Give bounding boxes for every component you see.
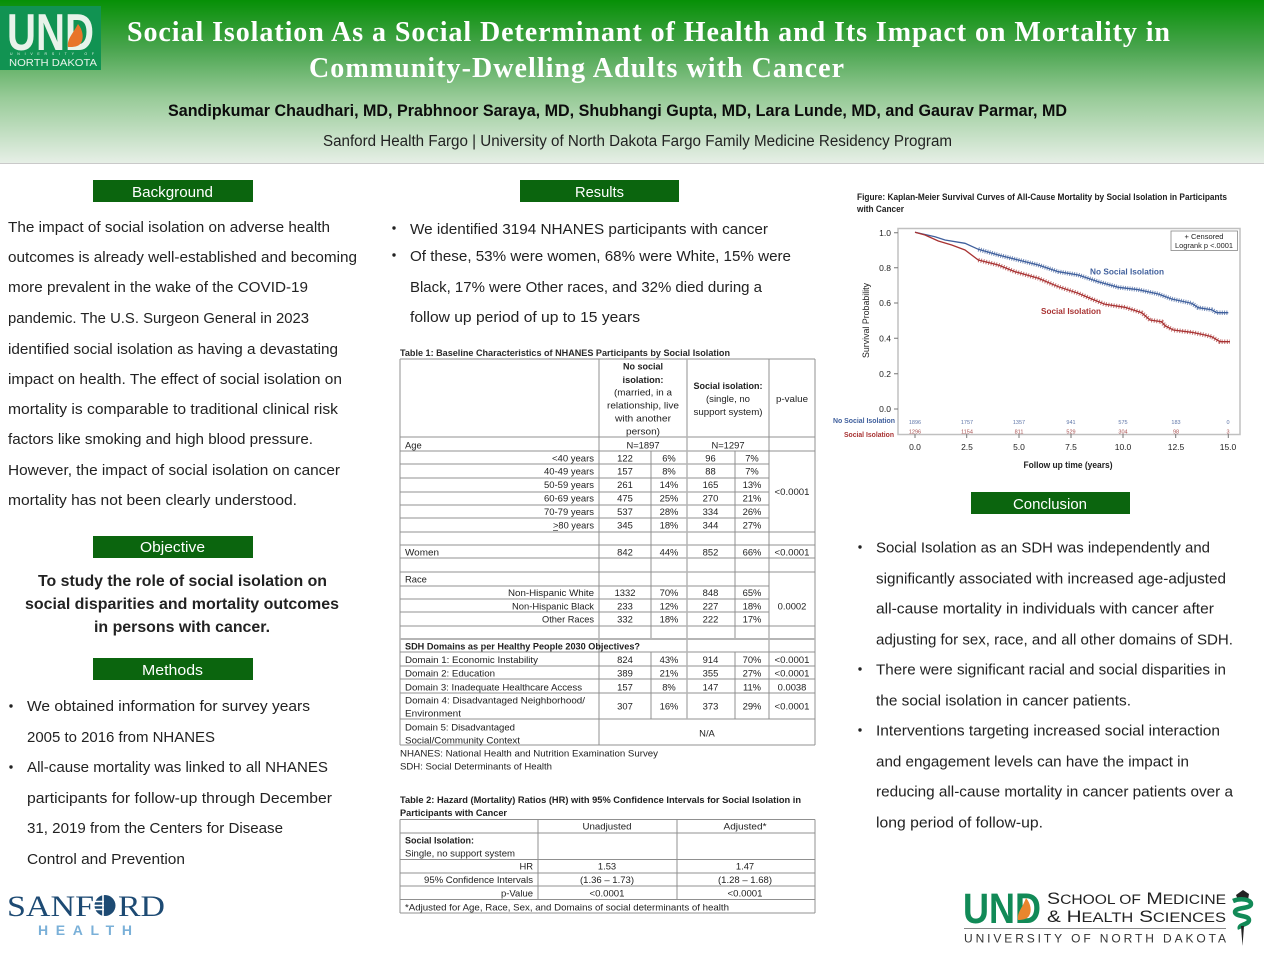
- table 1 SDH domain rows: 8%: [662, 682, 676, 692]
- logo: Sanford Health: RD: [118, 890, 165, 923]
- table 2 rows: 1.53: [598, 860, 616, 872]
- table 1 SDH domain rows: 157: [617, 682, 633, 692]
- table 1 header: relationship, live: [607, 400, 679, 410]
- at-risk table: 1296: [909, 430, 921, 436]
- table 1 race rows: Non-Hispanic Black: [512, 600, 594, 612]
- heading: conclusion: Conclusion: [1013, 497, 1087, 513]
- at-risk table: 941: [1066, 420, 1076, 426]
- table 1 women row: <0.0001: [774, 546, 810, 558]
- curve label: social isolation: Social Isolation: [1041, 306, 1101, 316]
- at-risk table: 304: [1118, 430, 1128, 436]
- y axis labels: 0.8: [879, 263, 891, 273]
- table 1 SDH domain rows: 11%: [743, 682, 761, 692]
- table 1 women row: 66%: [743, 546, 761, 558]
- text: conclusion bullets: Interventions targeting increased social interaction: [876, 722, 1220, 740]
- text: methods bullets: participants for follow-up through December: [27, 790, 332, 807]
- table 1 age rows: 70-79 years: [544, 506, 594, 517]
- legend box: + Censored: [1185, 232, 1223, 241]
- table 1 SDH domain rows: 27%: [743, 668, 761, 678]
- header banner: [0, 0, 1264, 164]
- authors: Sandipkumar Chaudhari, MD, Prabhnoor Saraya, MD, Shubhangi Gupta, MD, Lara Lunde, MD, and Gaurav Parmar, MD: [168, 102, 1067, 120]
- table 1 age rows: 344: [703, 520, 718, 530]
- table 1 age rows: <0.0001: [774, 486, 810, 497]
- table 1 age rows: 122: [617, 452, 633, 464]
- heading: results: [520, 180, 679, 202]
- title: Social Isolation As a Social Determinant of Health and Its Impact on Mortality in: [127, 17, 1170, 48]
- text: methods bullets: 2005 to 2016 from NHANES: [27, 729, 215, 746]
- table 1 header: Age: [405, 440, 422, 450]
- text: conclusion bullets: reducing all-cause mortality in cancer patients over a: [876, 784, 1234, 800]
- table 1 age rows: 345: [617, 520, 633, 530]
- panel: conclusion: [858, 492, 1234, 832]
- table 2 caption: Table 2: Hazard (Mortality) Ratios (HR) with 95% Confidence Intervals for Social Isolation in: [400, 794, 801, 805]
- table 1 SDH domain rows: <0.0001: [774, 654, 810, 665]
- curve: social isolation: [915, 232, 1230, 342]
- table 1 SDH domain rows: 70%: [743, 654, 761, 665]
- at-risk table: [833, 416, 1230, 439]
- text: background paragraph: factors like smoking and high blood pressure.: [8, 431, 313, 448]
- table 1 SDH domain rows: 389: [617, 668, 633, 678]
- text: background paragraph: more prevalent in the wake of the COVID-19: [8, 279, 308, 296]
- text: background paragraph: However, the impact of social isolation on cancer: [8, 462, 340, 479]
- table 1 race rows: [405, 574, 806, 624]
- table 1 header: [405, 360, 808, 450]
- y axis labels: 1.0: [879, 228, 891, 238]
- table 2 rows: <0.0001: [728, 888, 762, 898]
- text: conclusion bullets: Social Isolation as an SDH was independently and: [876, 540, 1210, 556]
- text: results bullets: [392, 221, 791, 326]
- text: background paragraph: impact on health. The effect of social isolation on: [8, 371, 342, 388]
- logo: University of North Dakota: NORTH DAKOTA: [9, 57, 97, 69]
- text: conclusion bullets: [858, 540, 1234, 832]
- logo: Sanford Health: HEALTH: [38, 922, 132, 938]
- table 2 rows: 95% Confidence Intervals: [424, 874, 533, 885]
- at-risk table: Social Isolation: [844, 430, 894, 439]
- text: conclusion bullets: significantly associated with increased age-adjusted: [876, 570, 1226, 588]
- table 1 age rows: 6%: [662, 452, 676, 464]
- heading: results: Results: [575, 185, 624, 201]
- table 1 race rows: 227: [703, 600, 718, 612]
- table 1 women row: 44%: [660, 546, 678, 558]
- table 1 age rows: 7%: [745, 452, 759, 464]
- table 1 age rows: 537: [617, 506, 633, 517]
- table 1 SDH domain rows: <0.0001: [774, 668, 810, 678]
- table 1 header: with another: [614, 412, 671, 424]
- logo: University of North Dakota: UND: [7, 4, 94, 62]
- table 1 SDH domain rows: 147: [703, 682, 718, 692]
- table 1 age rows: 157: [617, 466, 633, 476]
- table 1: baseline characteristics: [400, 347, 815, 772]
- table 1 SDH domain rows: 355: [703, 668, 718, 678]
- table 2 rows: HR: [519, 860, 533, 872]
- text: results bullets: We identified 3194 NHANES participants with cancer: [410, 221, 768, 238]
- logo: Sanford Health: [7, 890, 165, 938]
- table 1 header: support system): [694, 406, 762, 417]
- table 1 header: Social isolation:: [694, 380, 762, 391]
- x axis labels: 7.5: [1065, 442, 1077, 452]
- at-risk table: 1154: [961, 430, 973, 436]
- table 1 race rows: 0.0002: [778, 600, 806, 612]
- table 1 header: (single, no: [706, 393, 750, 404]
- heading: methods: Methods: [142, 663, 203, 679]
- table 1 SDH domain rows: Domain 3: Inadequate Healthcare Access: [405, 682, 582, 692]
- figure caption: Figure: Kaplan-Meier Survival Curves of All-Cause Mortality by Social Isolation in Participants: [857, 192, 1227, 202]
- table 1 SDH domain rows: 824: [617, 654, 633, 665]
- table 1 age rows: 270: [703, 492, 718, 504]
- table 1 SDH domain rows: <0.0001: [774, 700, 810, 712]
- table 2 rows: <0.0001: [590, 888, 624, 898]
- x axis labels: 12.5: [1168, 442, 1185, 452]
- text: background paragraph: The impact of social isolation on adverse health: [8, 219, 330, 236]
- table 1 header: person): [626, 426, 660, 436]
- text: conclusion bullets: long period of follow-up.: [876, 814, 1043, 832]
- table 1 age rows: 21%: [743, 492, 761, 504]
- text: conclusion bullets: There were significant racial and social disparities in: [876, 662, 1226, 678]
- table 1 SDH domain rows: 0.0038: [778, 682, 806, 692]
- table 1 age rows: 50-59 years: [544, 479, 594, 490]
- table 1 footnotes: [400, 748, 658, 772]
- table 1 age rows: 40-49 years: [544, 466, 594, 476]
- text: background paragraph: mortality is comparable to traditional clinical risk: [8, 401, 338, 418]
- table 1 header: p-value: [776, 393, 808, 404]
- logo: UND School of Medicine and Health Sciences: [963, 885, 1251, 946]
- table 1 age rows: 88: [705, 466, 716, 476]
- table 1 age rows: 96: [705, 452, 716, 464]
- text: background paragraph: pandemic. The U.S. Surgeon General in 2023: [8, 310, 309, 327]
- y axis labels: 0.4: [879, 334, 891, 344]
- table 1 age rows: 60-69 years: [544, 492, 594, 504]
- curve: no social isolation: [915, 232, 1228, 313]
- heading: objective: [93, 536, 253, 558]
- table 1 age rows: 25%: [660, 492, 678, 504]
- table 1 age rows: 18%: [660, 520, 678, 530]
- table 1 race rows: 12%: [660, 600, 678, 612]
- at-risk table: 3: [1226, 430, 1230, 436]
- table 1 age rows: 7%: [745, 466, 759, 476]
- table 1 age rows: 165: [703, 479, 718, 490]
- figure caption: [856, 192, 1227, 214]
- legend box: Logrank p <.0001: [1175, 241, 1233, 250]
- table 2 rows: Unadjusted: [582, 820, 632, 832]
- table 1 race rows: Race: [405, 574, 427, 584]
- table 1 age rows: 13%: [743, 479, 761, 490]
- table 1 race rows: 18%: [743, 600, 761, 612]
- table 1 age rows: 27%: [743, 520, 761, 530]
- at-risk table: 1896: [909, 420, 921, 426]
- figure caption: with Cancer: [856, 204, 904, 214]
- table 1 women row: [405, 546, 810, 558]
- text: objective statement: To study the role of social isolation on: [38, 573, 327, 590]
- table 1 race rows: 222: [703, 614, 718, 624]
- x axis labels: [909, 442, 1237, 470]
- text: methods bullets: 31, 2019 from the Centers for Disease: [27, 820, 283, 837]
- table 2 rows: (1.36 – 1.73): [580, 874, 634, 885]
- table 1 race rows: 65%: [743, 587, 761, 598]
- table 1 SDH domain rows: 307: [617, 700, 633, 712]
- table 1 age rows: 261: [617, 479, 633, 490]
- logo: UND School of Medicine and Health Sciences: UND: [963, 885, 1041, 933]
- y axis labels: 0.6: [879, 298, 891, 308]
- table 1 SDH domain rows: 914: [703, 654, 718, 665]
- table 2: hazard ratios: [400, 794, 815, 913]
- table 2 caption: [400, 794, 801, 818]
- x axis labels: 10.0: [1115, 442, 1132, 452]
- panel: objective: [25, 536, 339, 636]
- affiliations: Sanford Health Fargo | University of North Dakota Fargo Family Medicine Residency Program: [323, 133, 952, 150]
- table 1 header: N=1897: [626, 440, 660, 450]
- table 1 age rows: 475: [617, 492, 633, 504]
- at-risk table: 811: [1015, 430, 1023, 436]
- panel: background: [8, 180, 357, 509]
- table 2 rows: Single, no support system: [405, 848, 515, 858]
- figure: Kaplan-Meier survival chart: [833, 192, 1240, 470]
- table 1 SDH domain rows: SDH Domains as per Healthy People 2030 Objectives?: [405, 640, 640, 652]
- y axis labels: [861, 228, 891, 414]
- text: background paragraph: mortality has not been clearly understood.: [8, 492, 297, 509]
- logo: UND School of Medicine and Health Sciences: SCHOOL OF MEDICINE: [1047, 889, 1226, 908]
- logo: Sanford Health: SANF: [7, 890, 94, 923]
- chart frame and ticks: [894, 228, 1240, 438]
- table 1 SDH domain rows: Environment: [405, 708, 461, 718]
- logo: UND School of Medicine and Health Sciences: & H EALTH S CIENCES: [1047, 907, 1226, 926]
- table 1 race rows: Non-Hispanic White: [508, 587, 594, 598]
- heading: methods: [93, 658, 253, 680]
- table 1 header: No social: [623, 360, 663, 372]
- x axis labels: Follow up time (years): [1024, 460, 1113, 470]
- text: results bullets: Black, 17% were Other races, and 32% died during a: [410, 279, 763, 296]
- table 1 SDH domain rows: Social/Community Context: [405, 734, 520, 746]
- text: background paragraph: [8, 219, 357, 509]
- table 2 rows: p-Value: [501, 888, 533, 898]
- table 1 age rows: 8%: [662, 466, 676, 476]
- table 2 rows: [405, 820, 772, 912]
- text: background paragraph: outcomes is already well-established and becoming: [8, 249, 357, 266]
- table 1 race rows: 233: [617, 600, 633, 612]
- text: conclusion bullets: adjusting for sex, race, and all other domains of SDH.: [876, 632, 1233, 648]
- table 1 SDH domain rows: 373: [703, 700, 718, 712]
- table 1 women row: Women: [405, 546, 439, 558]
- panel: methods: [9, 658, 332, 868]
- table 1 race rows: Other Races: [542, 614, 594, 624]
- text: objective statement: social disparities and mortality outcomes: [25, 596, 339, 613]
- text: conclusion bullets: all-cause mortality in individuals with cancer after: [876, 600, 1214, 618]
- table 1 grid: [400, 359, 815, 745]
- legend box: [1171, 231, 1238, 250]
- table 1 women row: 852: [703, 546, 718, 558]
- table 1 SDH domain rows: Domain 4: Disadvantaged Neighborhood/: [405, 694, 585, 706]
- text: conclusion bullets: and engagement levels can have the impact in: [876, 754, 1189, 770]
- y axis labels: Survival Probability: [861, 283, 871, 358]
- y axis labels: 0.0: [879, 404, 891, 414]
- table 1 footnotes: NHANES: National Health and Nutrition Examination Survey: [400, 748, 658, 758]
- title: Community-Dwelling Adults with Cancer: [309, 53, 844, 84]
- table 1 header: N=1297: [711, 440, 745, 450]
- table 1 SDH domain rows: 29%: [743, 700, 761, 712]
- heading: conclusion: [971, 492, 1130, 514]
- x axis labels: 15.0: [1220, 442, 1237, 452]
- text: methods bullets: We obtained information for survey years: [27, 698, 310, 715]
- table 1 age rows: >80 years: [553, 520, 594, 530]
- table 1 SDH domain rows: Domain 1: Economic Instability: [405, 654, 538, 665]
- text: methods bullets: Control and Prevention: [27, 851, 185, 868]
- table 1 age rows: [544, 452, 810, 531]
- table 1 header: (married, in a: [614, 386, 673, 398]
- text: results bullets: Of these, 53% were women, 68% were White, 15% were: [410, 248, 791, 265]
- table 1 footnotes: SDH: Social Determinants of Health: [400, 760, 552, 772]
- text: conclusion bullets: the social isolation in cancer patients.: [876, 692, 1131, 710]
- table 2 rows: (1.28 – 1.68): [718, 874, 772, 885]
- panel: results: [392, 180, 791, 326]
- y axis labels: 0.2: [879, 369, 891, 379]
- text: background paragraph: identified social isolation as having a devastating: [8, 341, 338, 358]
- x axis labels: 5.0: [1013, 442, 1025, 452]
- table 2 grid: [400, 820, 815, 913]
- text: methods bullets: All-cause mortality was linked to all NHANES: [27, 759, 328, 776]
- x axis labels: 2.5: [961, 442, 973, 452]
- table 1 race rows: 18%: [660, 614, 678, 624]
- table 2 caption: Participants with Cancer: [400, 807, 507, 818]
- at-risk table: 575: [1118, 420, 1128, 426]
- table 2 rows: Social Isolation:: [405, 834, 474, 846]
- at-risk table: 529: [1066, 430, 1076, 436]
- at-risk table: 98: [1173, 430, 1179, 436]
- text: methods bullets: [9, 698, 332, 868]
- table 1 SDH domain rows: Domain 5: Disadvantaged: [405, 722, 515, 732]
- text: objective statement: [25, 573, 339, 636]
- table 1 caption: Table 1: Baseline Characteristics of NHANES Participants by Social Isolation: [400, 347, 730, 358]
- curve label: no social isolation: No Social Isolation: [1090, 266, 1164, 276]
- heading: objective: Objective: [140, 540, 205, 556]
- table 2 rows: *Adjusted for Age, Race, Sex, and Domains of social determinants of health: [405, 902, 729, 912]
- table 2 rows: 1.47: [736, 860, 754, 872]
- table 1 age rows: <40 years: [552, 452, 594, 464]
- table 1 SDH domain rows: [405, 640, 810, 746]
- at-risk table: No Social Isolation: [833, 416, 895, 425]
- title: [127, 17, 1170, 84]
- table 1 race rows: 848: [703, 587, 718, 598]
- table 1 SDH domain rows: 21%: [660, 668, 678, 678]
- table 1 race rows: 332: [617, 614, 633, 624]
- at-risk table: 1757: [961, 420, 973, 426]
- heading: background: Background: [132, 185, 213, 201]
- table 2 rows: Adjusted*: [724, 820, 767, 832]
- table 1 SDH domain rows: 43%: [660, 654, 678, 665]
- at-risk table: 183: [1171, 420, 1181, 426]
- text: objective statement: in persons with cancer.: [94, 619, 270, 636]
- logo: University of North Dakota: UNIVERSITY OF: [10, 52, 94, 56]
- table 1 race rows: 17%: [743, 614, 761, 624]
- table 1 header: isolation:: [622, 374, 664, 385]
- table 1 SDH domain rows: Domain 2: Education: [405, 668, 495, 678]
- table 1 age rows: 14%: [660, 479, 678, 490]
- at-risk table: 1357: [1013, 420, 1025, 426]
- at-risk table: 0: [1226, 420, 1230, 426]
- table 1 SDH domain rows: N/A: [699, 728, 716, 738]
- table 1 women row: 842: [617, 546, 633, 558]
- table 1 SDH domain rows: 16%: [660, 700, 678, 712]
- table 1 age rows: 334: [703, 506, 718, 517]
- heading: background: [93, 180, 253, 202]
- table 1 age rows: 26%: [743, 506, 761, 517]
- x axis labels: 0.0: [909, 442, 921, 452]
- table 1 race rows: 1332: [615, 587, 635, 598]
- table 1 race rows: 70%: [660, 587, 678, 598]
- logo: UND School of Medicine and Health Sciences: UNIVERSITY OF NORTH DAKOTA: [964, 932, 1226, 946]
- text: results bullets: follow up period of up to 15 years: [410, 309, 640, 326]
- table 1 age rows: 28%: [660, 506, 678, 517]
